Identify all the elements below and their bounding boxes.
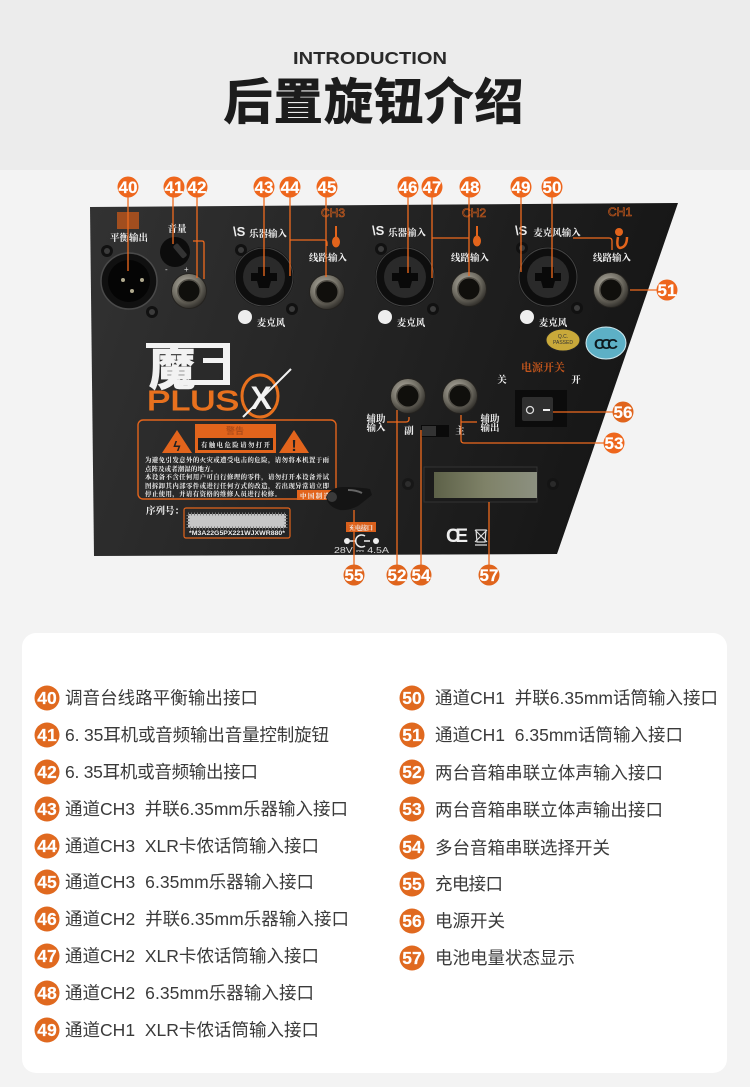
aux jacks 52 and 53: 主 [455,425,465,437]
charging port labels: 28V ⎓ 4.5A [334,546,390,555]
heading: main title: 后置旋钮介绍 [224,76,524,130]
legend item 40: 调音台线路平衡输出接口 [65,688,258,708]
callout 53: 53 [605,434,623,453]
channel 2 connectors: 乐器输入 [388,227,426,239]
legend item 49: 49 [37,1020,57,1040]
aux jacks 52 and 53: 输出 [480,422,500,434]
callout 55: 55 [345,566,363,585]
warning box: 有触电危险请勿打开 [201,440,271,449]
channel 1 connectors [515,205,632,329]
callout 54: 54 [412,566,431,585]
heading: INTRODUCTION: INTRODUCTION [293,48,447,68]
legend item 42: 6. 35耳机或音频输出接口 [65,762,258,782]
headphone jack 42 [171,273,207,309]
QC passed sticker [546,329,580,351]
channel 2 connectors [372,206,489,329]
legend item 46: 46 [37,909,57,929]
aux jacks 52 and 53: 副 [404,425,414,437]
power switch: 电源开关 [521,360,565,374]
legend item 53: 两台音箱串联立体声输出接口 [435,800,663,820]
power switch [497,360,581,427]
battery LCD display [402,467,559,502]
callout 44: 44 [281,178,300,197]
legend item 54 [400,834,610,860]
legend item 56 [400,908,505,934]
brand logo: 魔 [149,343,195,395]
legend item 55: 55 [402,874,422,894]
callout 45: 45 [318,178,336,197]
logo X emblem: X [250,380,272,416]
legend item 47: 47 [37,946,57,966]
legend item 57: 电池电量状态显示 [435,948,575,968]
callout numbers on photo [118,176,678,586]
panel: legend card [22,633,727,1073]
callout 42: 42 [188,178,206,197]
warning box: 警告 [226,425,244,436]
logo X emblem [242,369,291,417]
QC passed sticker: Q.C. [558,334,568,340]
legend item 52: 两台音箱串联立体声输入接口 [435,763,663,783]
legend item 42 [34,760,258,784]
legend item 45: 通道CH3 6.35mm乐器输入接口 [65,872,314,892]
callout 46: 46 [399,178,417,197]
volume knob 41: + [184,265,189,274]
aux jacks 52 and 53 [366,378,500,437]
legend item 43: 43 [37,799,57,819]
callout 47: 47 [423,178,441,197]
callout 57: 57 [480,566,498,585]
CE and WEEE marks [446,526,487,547]
channel 2 connectors: \S [372,223,385,238]
legend item 55 [400,872,503,896]
warning box: 点阵及或者潮湿的地方。 [145,464,217,473]
legend item 56: 56 [402,911,422,931]
callout 52: 52 [388,566,406,585]
legend item 40: 40 [37,688,57,708]
leader lines [128,187,667,575]
channel 2 connectors: 线路输入 [451,252,489,264]
legend item 52 [400,760,663,784]
power switch: 关 [497,374,507,386]
legend item 53 [400,796,663,822]
card background [22,633,727,1073]
legend item 57 [400,946,575,970]
legend item 57: 57 [402,948,422,968]
output section icon and label [110,212,148,244]
callout 48: 48 [461,178,479,197]
legend item 50: 50 [402,688,422,708]
channel 1 connectors: 麦克风输入 [533,227,581,239]
charging knob connector [326,487,372,510]
warning box: ϟ [173,438,181,454]
legend item 48: 通道CH2 6.35mm乐器输入接口 [65,983,314,1003]
legend item 51 [400,722,683,748]
legend item 49: 通道CH1 XLR卡侬话筒输入接口 [65,1020,319,1040]
CCC sticker [586,327,626,359]
legend item 43: 通道CH3 并联6.35mm乐器输入接口 [65,799,348,819]
QC passed sticker: PASSED [553,340,573,346]
legend item 54: 54 [402,837,422,857]
channel 3 connectors: 线路输入 [309,252,347,264]
channel 3 connectors: 麦克风 [257,317,286,329]
volume knob 41: 音量 [167,223,187,235]
aux jacks 52 and 53: 辅助 [480,413,500,425]
warning box: 为避免引发意外的火灾或遭受电击的危险，请勿将本机置于雨 [145,455,330,465]
legend item 55: 充电接口 [435,874,503,894]
brand logo [146,343,291,417]
panel body [90,203,678,556]
legend item 51: 51 [402,725,422,745]
legend item 52: 52 [402,762,422,782]
CE and WEEE marks: CE [446,526,468,547]
serial number and barcode [146,505,290,538]
legend item 45: 45 [37,872,57,892]
callout 50: 50 [543,178,561,197]
rear control panel photo [90,187,678,575]
warning box: 图拆卸其内部零件或进行任何方式的改造，若出现异常请立即 [145,481,330,491]
output section icon and label: 平衡输出 [110,232,148,244]
charging port labels [334,522,390,555]
callout 40: 40 [119,178,137,197]
CCC sticker: CCC [594,336,618,353]
legend item 51: 通道CH1 6.35mm话筒输入接口 [435,725,683,745]
callout 56: 56 [614,403,632,422]
legend item 53: 53 [402,799,422,819]
legend item 44: 44 [37,836,57,856]
channel 2 connectors: 麦克风 [397,317,426,329]
callout 49: 49 [512,178,530,197]
channel 1 connectors: 麦克风 [539,317,568,329]
channel 1 connectors: 线路输入 [593,252,631,264]
channel 3 connectors: \S [233,224,246,239]
volume knob 41: - [165,265,168,274]
legend item 44: 通道CH3 XLR卡侬话筒输入接口 [65,836,319,856]
channel 3 connectors: CH3 [321,206,345,220]
logo wordmark PLUS: PLUS [147,385,239,416]
channel 1 connectors: \S [515,223,528,238]
warning box: ! [291,438,297,455]
power switch: 开 [571,374,581,386]
volume knob 41 [160,223,190,274]
callout 43: 43 [255,178,273,197]
warning box: 中国制造 [300,491,331,500]
legend item 41: 6. 35耳机或音频输出音量控制旋钮 [65,725,329,745]
legend item 50: 通道CH1 并联6.35mm话筒输入接口 [435,688,718,708]
serial number and barcode: *M3A22G5PX221WJXWR880* [189,530,285,537]
legend item 41: 41 [37,725,57,745]
XLR output connector [101,245,158,318]
legend item 40 [34,686,258,710]
legend item 48: 48 [37,983,57,1003]
serial number and barcode: 序列号： [146,505,184,517]
legend item 42: 42 [37,762,57,782]
slide switch 54 [421,425,449,437]
channel 1 connectors: CH1 [608,205,632,219]
background band: header [0,0,750,170]
warning box: 停止使用，并请有资格的维修人员进行检修。 [145,489,281,499]
aux jacks 52 and 53: 输入 [366,422,386,434]
legend item 54: 多台音箱串联选择开关 [435,838,610,858]
channel 3 connectors: 乐器输入 [249,228,287,240]
warning box [138,420,336,500]
channel 3 connectors [233,206,347,329]
warning box: 本设备不含任何用户可自行修理的零件，请勿打开本设备并试 [145,472,330,482]
callout 51: 51 [658,281,676,300]
charging port labels: 充电接口 [349,523,373,532]
channel 2 connectors: CH2 [462,206,486,220]
legend item 46: 通道CH2 并联6.35mm乐器输入接口 [65,909,349,929]
callout 41: 41 [165,178,183,197]
legend item 56: 电源开关 [435,911,505,931]
legend item 47: 通道CH2 XLR卡侬话筒输入接口 [65,946,319,966]
aux jacks 52 and 53: 辅助 [366,413,386,425]
